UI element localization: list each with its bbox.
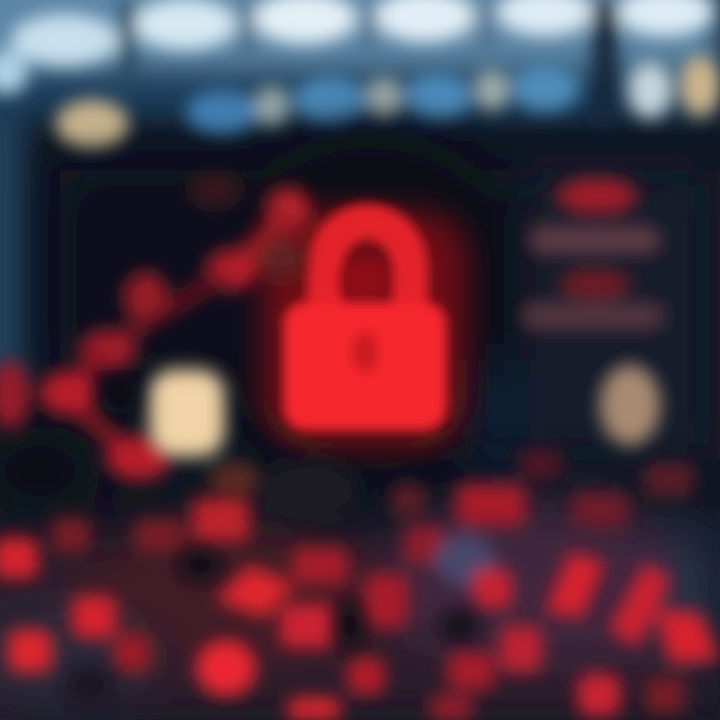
icon: padlock	[262, 210, 467, 448]
lock keyhole	[352, 332, 378, 372]
scattered red tiles	[0, 450, 720, 720]
background: dark area behind lock	[60, 130, 710, 470]
right side blurred text block	[522, 178, 664, 330]
cream highlights	[150, 365, 660, 498]
window panes: lower row	[56, 56, 720, 148]
lock glow	[262, 210, 467, 448]
lock shackle	[325, 222, 410, 310]
background: upper band	[0, 0, 720, 380]
lower scattered field base	[0, 426, 720, 720]
lock shackle opening	[340, 258, 390, 302]
window panes: top row	[0, 0, 713, 124]
dark gaps in tiles	[64, 375, 480, 705]
chain of red links	[0, 172, 310, 480]
lock body	[284, 302, 446, 430]
